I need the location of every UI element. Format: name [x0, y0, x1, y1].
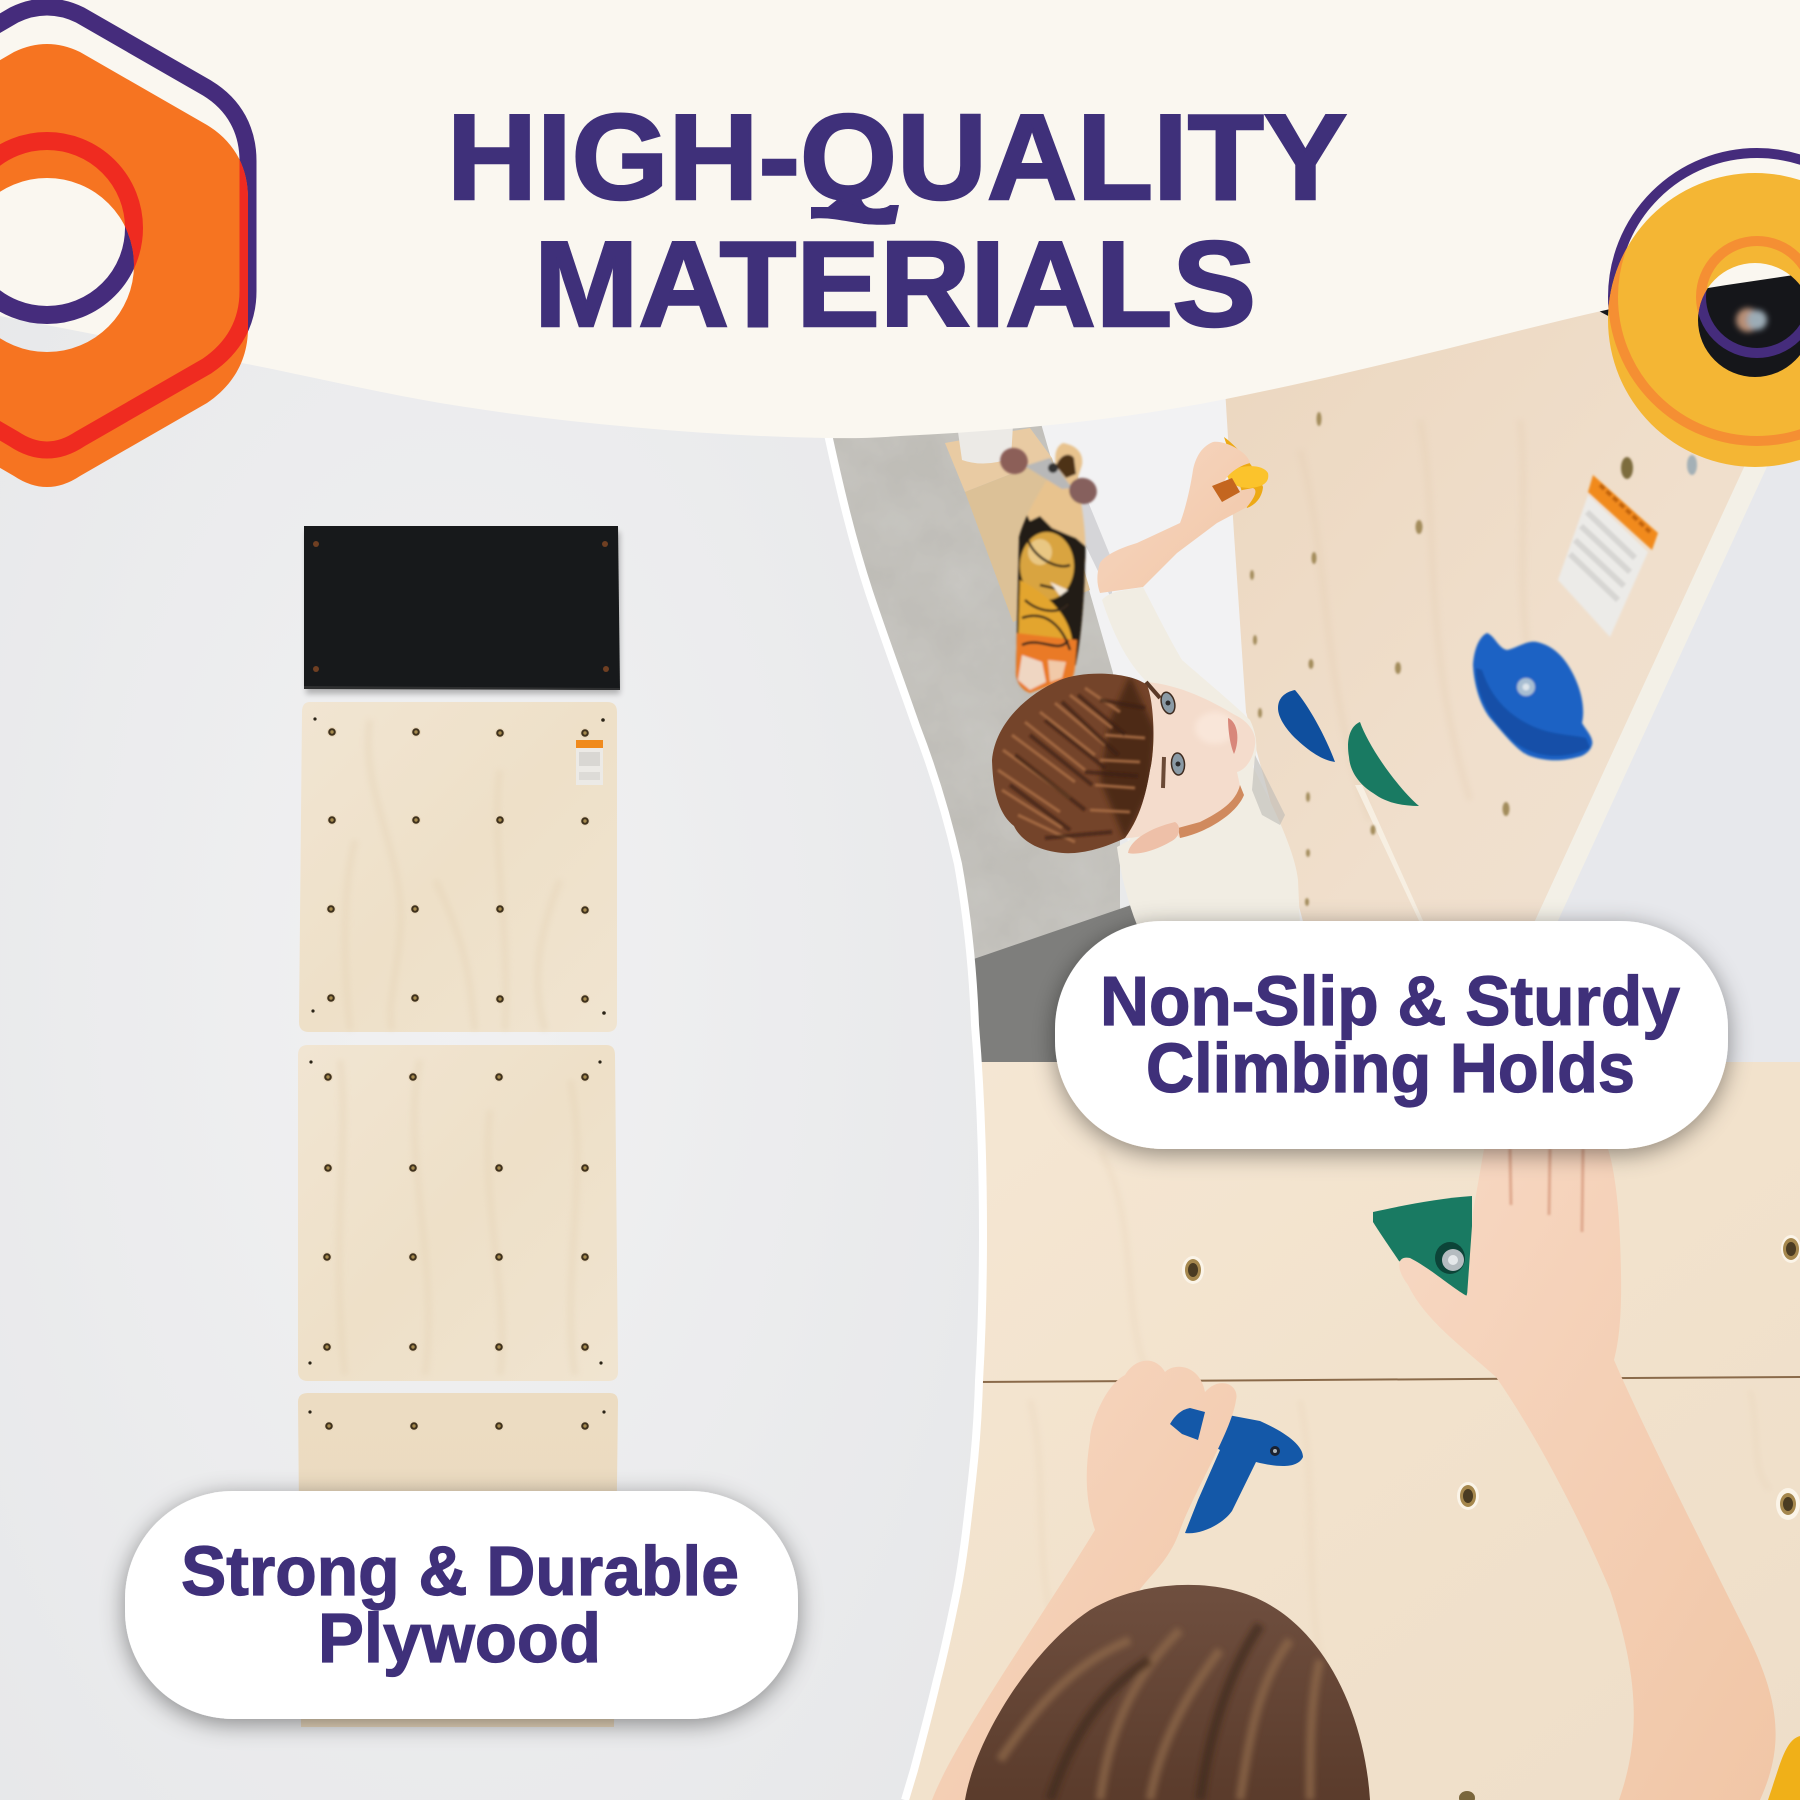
- wall warning sticker: [1558, 475, 1658, 637]
- concrete floor: [833, 426, 1120, 958]
- panel seam: [975, 1377, 1800, 1382]
- wall base shadow: [1078, 477, 1112, 594]
- arm and hand: [1097, 442, 1255, 593]
- callout line one: Strong & Durable: [181, 1532, 739, 1610]
- hair: [992, 674, 1154, 854]
- title line two: MATERIALS: [534, 216, 1256, 352]
- header: cream curved band: [0, 0, 1800, 438]
- eyes and brows: [1160, 692, 1176, 714]
- icon: orange hex nut: [0, 7, 248, 487]
- plywood wall: [1226, 312, 1744, 921]
- panel: plywood product photo background: [0, 0, 1000, 1800]
- icon: blue hold: [1185, 1416, 1303, 1534]
- plywood background: [860, 1062, 1800, 1800]
- hair: [960, 1575, 1380, 1800]
- hold seen through fingers: [1170, 1408, 1205, 1440]
- icon: yellow wheel: [1608, 153, 1800, 467]
- blurred bolt: [1736, 308, 1767, 332]
- orange overlap rings: [1613, 153, 1800, 441]
- purple wheel rings: [1613, 153, 1800, 441]
- black wall top: [1600, 276, 1800, 377]
- panel: boy climbing photo: [820, 240, 1800, 1080]
- panel: climbing photos: [820, 240, 1800, 1800]
- yellow hold: [1224, 437, 1268, 508]
- warning sticker: [576, 740, 603, 785]
- orange nut body: [0, 44, 248, 487]
- callout: Non-Slip & Sturdy Climbing Holds: [1055, 921, 1728, 1149]
- purple nut hole ring: [0, 141, 134, 315]
- wooden stand: [945, 425, 1090, 622]
- icon: green hold: [1348, 722, 1419, 806]
- black top board: [304, 526, 620, 694]
- red overlap lines: [0, 7, 248, 450]
- title: [447, 89, 1347, 352]
- icon: small blue hold: [1278, 690, 1335, 762]
- face: [1125, 682, 1255, 838]
- wood panel two: [298, 1045, 618, 1381]
- ear: [1128, 822, 1179, 854]
- wood panel one: [299, 702, 617, 1032]
- Q tail flourish: [811, 199, 899, 225]
- frame strip: [1535, 466, 1767, 921]
- callout: Strong & Durable Plywood: [125, 1491, 798, 1719]
- inner purple ring: [1701, 241, 1800, 353]
- bolt holes: [1182, 1235, 1800, 1800]
- skateboard: [996, 443, 1101, 700]
- wall bolt holes: [1250, 412, 1697, 906]
- lips: [1228, 718, 1237, 754]
- right room background: [1500, 300, 1800, 1080]
- panel: hands on climbing wall photo: [860, 1062, 1800, 1800]
- white wall: [1040, 380, 1310, 925]
- wood panel three: [298, 1393, 618, 1727]
- callout line one: Non-Slip & Sturdy: [1100, 962, 1680, 1040]
- t-shirt: [1102, 587, 1300, 925]
- left hand and arm: [932, 1361, 1237, 1800]
- icon: large blue hold: [1473, 633, 1592, 760]
- purple nut outline: [0, 7, 248, 450]
- photo divider: white curve: [826, 425, 983, 1800]
- callout line two: Plywood: [318, 1599, 601, 1677]
- right hand and arm: [1399, 1149, 1776, 1800]
- icon: green hold: [1373, 1196, 1472, 1297]
- callout line two: Climbing Holds: [1146, 1029, 1635, 1107]
- yellow wheel body: [1608, 173, 1800, 467]
- yellow hold bottom right: [1768, 1736, 1800, 1800]
- title line one: HIGH-QUALITY: [447, 89, 1347, 225]
- boy: [985, 437, 1300, 925]
- dark floor mat: [974, 906, 1137, 1062]
- panel: plywood wall panels: [298, 526, 620, 1727]
